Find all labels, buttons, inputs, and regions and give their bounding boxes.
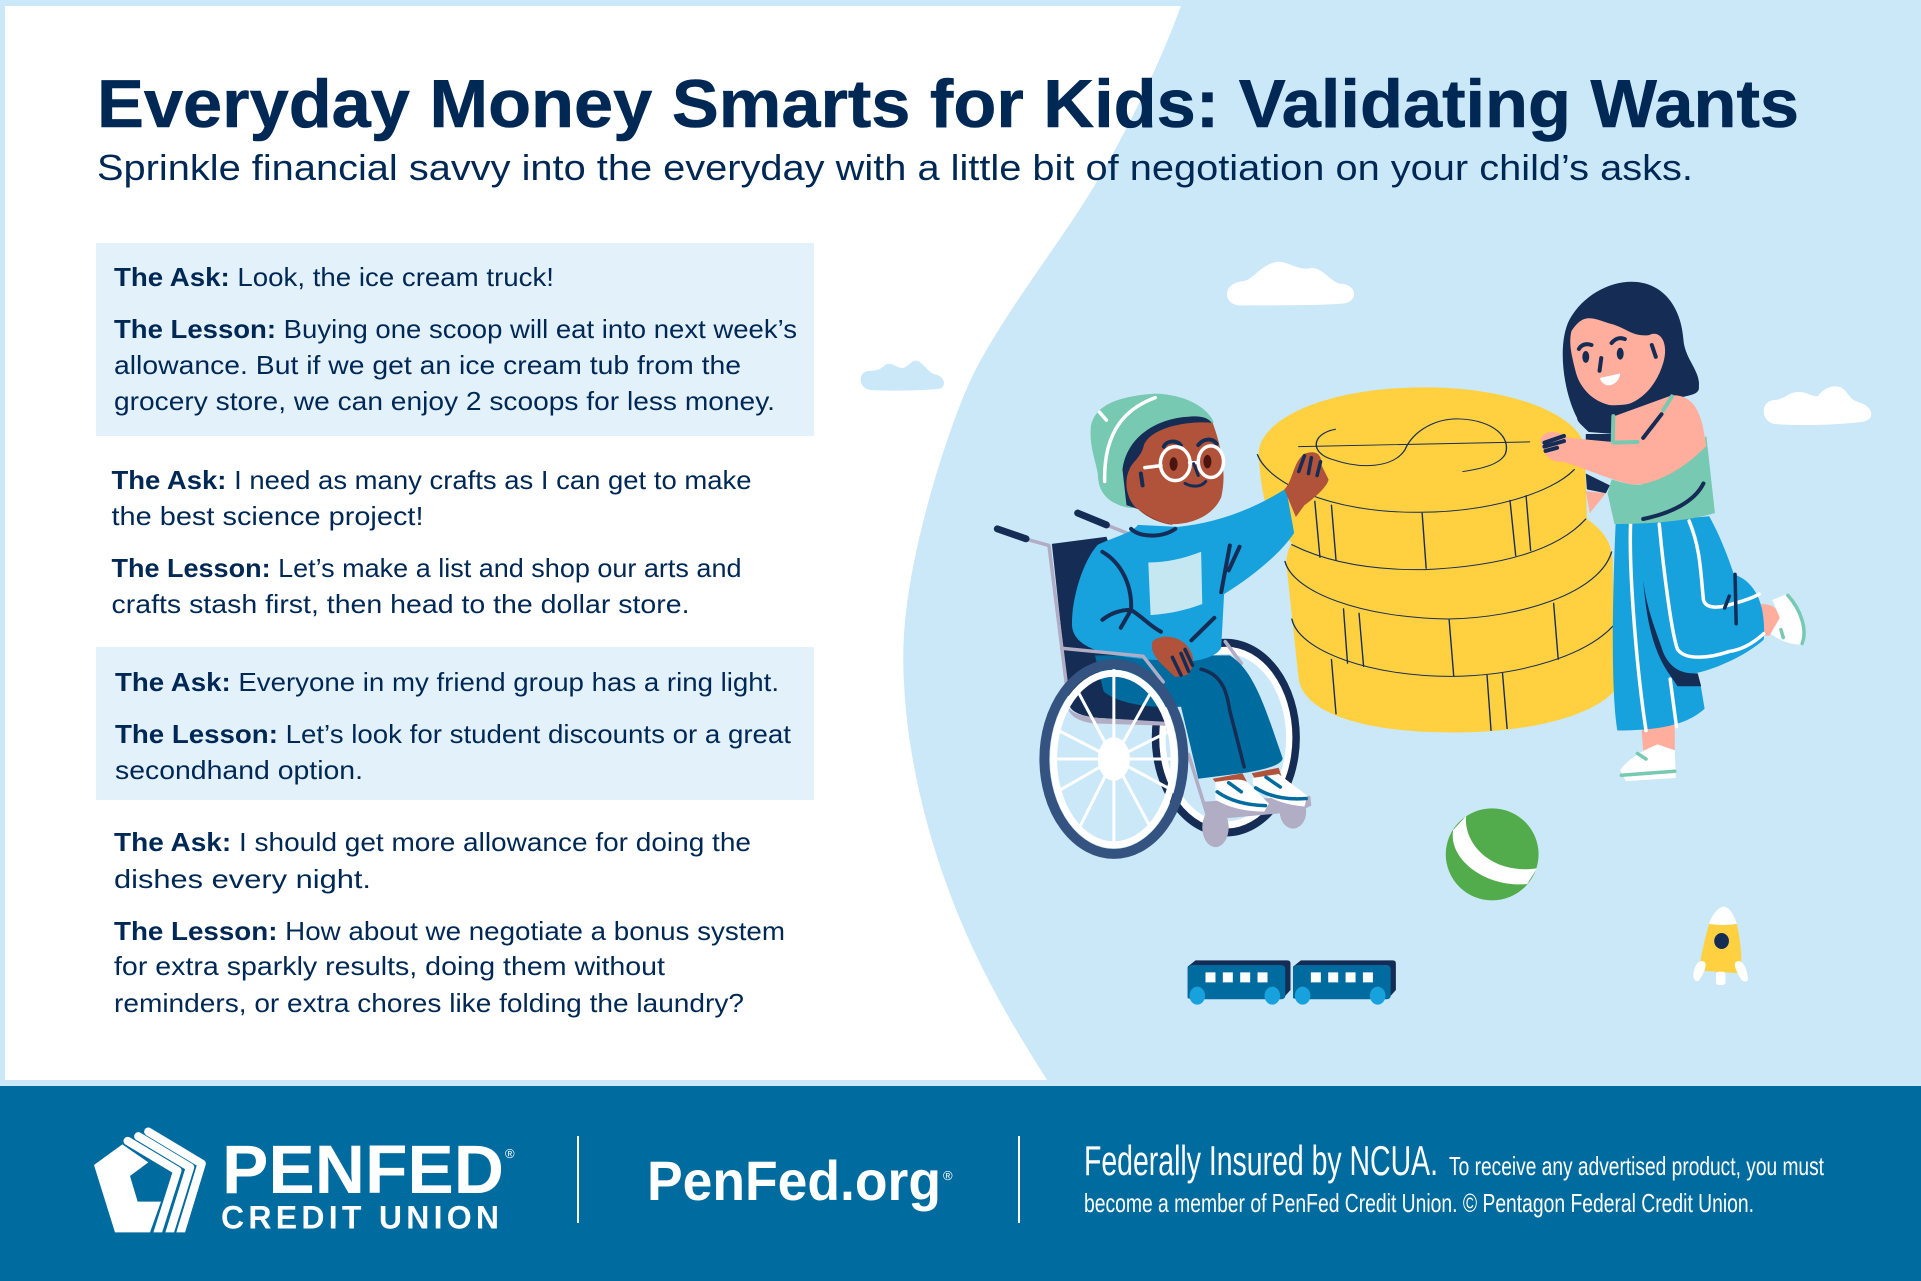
panel: ring light — [96, 647, 814, 800]
icon: green ball — [1446, 808, 1539, 900]
wheelchair back wheel — [1152, 639, 1300, 836]
panel: ice cream truck: grocery store, we can enjoy 2 scoops for less money. — [114, 386, 775, 416]
panel: allowance for dishes: The Lesson: How about we negotiate a bonus system — [114, 916, 785, 946]
legal disclosure — [1084, 1137, 1825, 1218]
PenFed.org web address: PenFed.org — [647, 1149, 941, 1212]
icon: toy rocket — [1693, 907, 1748, 985]
panel: science project crafts: crafts stash first, then head to the dollar store. — [112, 589, 690, 619]
girl standing leg and pants — [1613, 516, 1805, 781]
wheelchair front wheel — [1044, 664, 1183, 854]
panel: ice cream truck — [96, 243, 814, 436]
PenFed logo: ® — [505, 1146, 515, 1161]
boy head — [1091, 394, 1224, 525]
panel: science project crafts: the best science project! — [112, 501, 424, 531]
panel: science project crafts — [112, 465, 752, 619]
legal disclosure: Federally Insured by NCUA. — [1084, 1137, 1438, 1184]
icon: small left cloud — [861, 360, 944, 391]
footer band — [0, 1086, 1921, 1281]
illustration: kids and coins — [997, 262, 1805, 854]
panel: allowance for dishes: for extra sparkly results, doing them without — [114, 951, 666, 981]
PenFed logo: CREDIT UNION — [221, 1200, 499, 1236]
PenFed logo — [94, 1131, 515, 1239]
panel: allowance for dishes: dishes every night. — [114, 864, 371, 894]
toys — [1188, 808, 1748, 1005]
panel: science project crafts: The Ask: I need as many crafts as I can get to make — [112, 465, 752, 495]
panel: ring light: secondhand option. — [115, 755, 363, 785]
coin stack — [1257, 387, 1614, 733]
boy hands — [1152, 452, 1329, 677]
panel: ring light: The Lesson: Let’s look for student discounts or a great — [115, 719, 792, 749]
boy sweater — [1072, 489, 1294, 661]
wheelchair armrest — [1062, 648, 1163, 682]
background blue blob — [903, 0, 1921, 1085]
panel: ring light: The Ask: Everyone in my friend group has a ring light. — [115, 667, 779, 697]
icon: toy train — [1188, 960, 1396, 1005]
panel: allowance for dishes — [114, 827, 785, 1018]
girl face — [1570, 318, 1665, 407]
girl upper body — [1541, 282, 1715, 524]
panel: ice cream truck: The Ask: Look, the ice cream truck! — [114, 262, 554, 292]
boy legs and shoes — [1095, 655, 1307, 812]
subtitle: Sprinkle financial savvy into the everyday with a little bit of negotiation on your child’s asks. — [97, 147, 1693, 188]
icon: right cloud — [1764, 386, 1871, 425]
title: Everyday Money Smarts for Kids: Validating Wants — [97, 66, 1799, 142]
panel: allowance for dishes: reminders, or extra chores like folding the laundry? — [114, 988, 744, 1018]
panel: ice cream truck: The Lesson: Buying one scoop will eat into next week’s — [114, 314, 797, 344]
panel: science project crafts: The Lesson: Let’s make a list and shop our arts and — [112, 553, 742, 583]
panel: ice cream truck: allowance. But if we get an ice cream tub from the — [114, 350, 741, 380]
wheelchair seat and frame — [997, 513, 1311, 847]
PenFed.org web address: ® — [943, 1168, 953, 1183]
panel: allowance for dishes: The Ask: I should get more allowance for doing the — [114, 827, 751, 857]
icon: top cloud — [1227, 262, 1354, 305]
PenFed logo: PENFED — [222, 1131, 504, 1208]
